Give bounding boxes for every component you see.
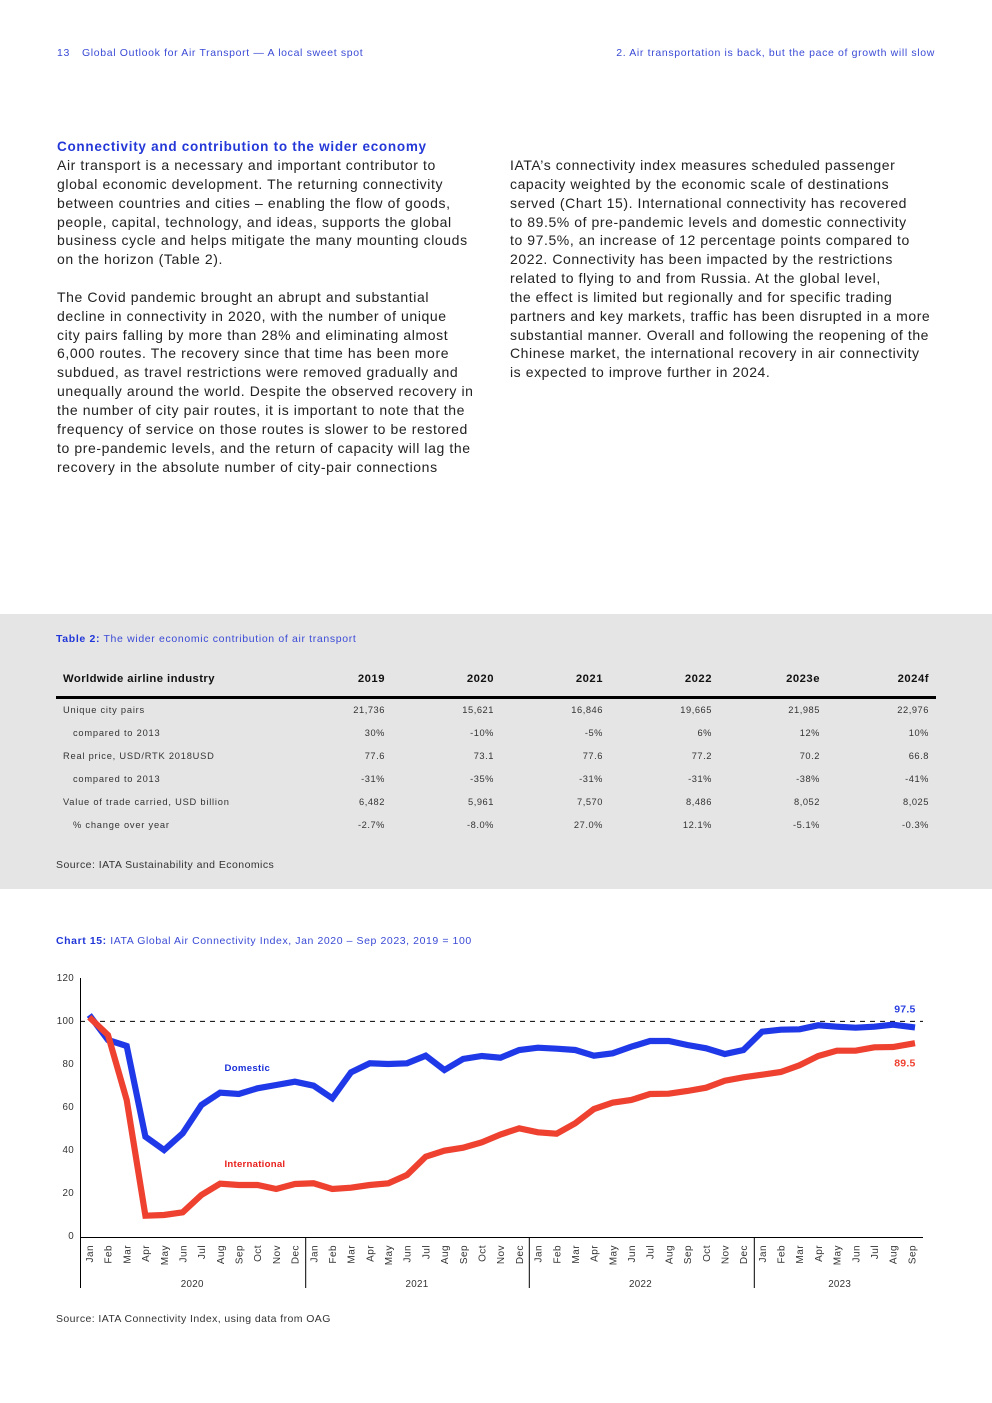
line: domestic (89, 1015, 915, 1150)
month labels: Nov (720, 1245, 732, 1264)
month labels: May (608, 1245, 619, 1265)
table: airline industry: -5.1% (793, 820, 820, 830)
text block: left column: recovery in the absolute number of city-pair connections (57, 458, 438, 474)
month labels: Apr (141, 1245, 152, 1262)
table: airline industry: 5,961 (468, 796, 494, 806)
month labels: Oct (702, 1245, 713, 1262)
year labels: 2020 (181, 1279, 204, 1290)
text block: left column: decline in connectivity in 2020, with the number of unique (57, 308, 447, 324)
text block: left column: people, capital, technology, and ideas, supports the global (57, 214, 452, 230)
table: airline industry: 2024f (898, 673, 929, 685)
month labels: Mar (347, 1245, 358, 1264)
text block: right column (510, 157, 930, 380)
text block: left column: subdued, as travel restrictions were removed gradually and (57, 364, 458, 380)
table: airline industry: compared to 2013 (73, 774, 160, 784)
month labels: May (160, 1245, 171, 1265)
table: airline industry: -0.3% (902, 820, 929, 830)
y axis labels (57, 973, 74, 1242)
table: airline industry: % change over year (73, 820, 170, 830)
table: airline industry: 30% (365, 728, 385, 738)
month labels: Jul (421, 1245, 432, 1259)
end value: domestic: 97.5 (894, 1004, 916, 1016)
month labels: Jun (178, 1245, 189, 1262)
month labels: Dec (515, 1245, 526, 1264)
text block: left column: to pre-pandemic levels, and the return of capacity will lag the (57, 440, 471, 456)
month labels: Aug (664, 1245, 675, 1264)
month labels: Oct (478, 1245, 488, 1262)
year labels: 2021 (406, 1279, 428, 1290)
month labels: Oct (253, 1245, 264, 1262)
month labels: Jun (851, 1245, 862, 1262)
text block: right column: Chinese market, the international recovery in air connectivity (510, 345, 920, 361)
month labels: Aug (440, 1245, 451, 1264)
month labels: Mar (122, 1245, 133, 1264)
table: airline industry: 8,025 (903, 796, 929, 806)
table: airline industry: -2.7% (358, 820, 385, 830)
series label: domestic: Domestic (224, 1063, 270, 1074)
text block: left column: business cycle and helps mitigate the many mounting clouds (57, 232, 468, 248)
text block: right column: IATA’s connectivity index measures scheduled passenger (510, 157, 895, 173)
month labels: Jan (534, 1245, 545, 1262)
y axis labels: 100 (57, 1016, 74, 1027)
table: airline industry: 2022 (685, 673, 712, 685)
text block: right column: substantial manner. Overall and following the reopening of the (510, 327, 929, 343)
y axis labels: 0 (68, 1231, 74, 1242)
table: airline industry: Real price, USD/RTK 2018USD (63, 750, 215, 760)
month labels: Mar (795, 1245, 806, 1264)
text block: left column: on the horizon (Table 2). (57, 251, 223, 267)
text block: left column: frequency of service on those routes is slower to be restored (57, 421, 468, 437)
month labels: Jan (309, 1245, 320, 1262)
month labels: Feb (552, 1245, 563, 1264)
table: airline industry: 2021 (576, 673, 603, 685)
table: airline industry: 2023e (786, 673, 820, 685)
table: airline industry: 77.6 (583, 750, 603, 760)
table: airline industry: -31% (579, 774, 603, 784)
table: airline industry: 6,482 (359, 796, 385, 806)
month labels: May (384, 1245, 395, 1265)
table: airline industry: 21,985 (788, 704, 820, 714)
table: airline industry: -8.0% (467, 820, 494, 830)
table: airline industry: 2020 (467, 673, 494, 685)
table: airline industry: 19,665 (680, 704, 712, 714)
month labels: Sep (907, 1245, 918, 1264)
text block: right column: to 89.5% of pre-pandemic levels and domestic connectivity (510, 214, 907, 230)
table: airline industry: 10% (909, 728, 929, 738)
text block: right column: served (Chart 15). International connectivity has recovered (510, 195, 907, 211)
table source: Source: IATA Sustainability and Economics (56, 859, 274, 871)
month labels: Dec (739, 1245, 750, 1264)
month labels: Jan (85, 1245, 96, 1262)
text block: left column: Air transport is a necessary and important contributor to (57, 157, 436, 173)
text block: right column: partners and key markets, traffic has been disrupted in a more (510, 308, 930, 324)
text block: left column: city pairs falling by more than 28% and eliminating almost (57, 327, 448, 343)
month labels: Jun (403, 1245, 414, 1262)
text block: left column: the number of city pair routes, it is important to note that the (57, 402, 465, 418)
series label: international: International (224, 1159, 285, 1170)
month labels: Nov (272, 1245, 283, 1264)
axes (80, 978, 923, 1288)
page header left: 13 Global Outlook for Air Transport — A local sweet spot (57, 47, 363, 59)
table: airline industry: -5% (585, 728, 603, 738)
text block: left column (57, 157, 474, 475)
reference line at 100 (80, 1020, 923, 1022)
month labels: Jul (870, 1245, 881, 1259)
year labels: 2023 (828, 1279, 851, 1290)
table: airline industry: 12% (800, 728, 820, 738)
text block: right column: to 97.5%, an increase of 12 percentage points compared to (510, 232, 910, 248)
month labels: Apr (814, 1245, 825, 1262)
y axis labels: 40 (62, 1145, 74, 1156)
table: airline industry: -38% (796, 774, 820, 784)
month labels: May (833, 1245, 844, 1265)
table: airline industry: Value of trade carried, USD billion (63, 796, 230, 806)
year labels (181, 1279, 851, 1290)
text block: right column: 2022. Connectivity has been impacted by the restrictions (510, 251, 893, 267)
table: airline industry: 77.2 (692, 750, 712, 760)
table: airline industry: -41% (905, 774, 929, 784)
table: airline industry: 2019 (358, 673, 385, 685)
table: airline industry: Worldwide airline industry (63, 673, 215, 685)
table: airline industry: 12.1% (683, 820, 712, 830)
table: airline industry: 6% (697, 728, 712, 738)
table: airline industry: -10% (470, 728, 494, 738)
table: airline industry: 8,486 (686, 796, 712, 806)
year labels: 2022 (629, 1279, 652, 1290)
text block: right column: capacity weighted by the economic scale of destinations (510, 176, 889, 192)
month labels: Jul (197, 1245, 208, 1259)
month labels: Nov (496, 1245, 507, 1264)
table: airline industry: 27.0% (574, 820, 603, 830)
table: airline industry: 8,052 (794, 796, 820, 806)
month labels: Jul (646, 1245, 657, 1259)
month labels: Sep (234, 1245, 246, 1264)
section heading: Connectivity and contribution to the wider economy (57, 139, 427, 154)
table caption: Table 2: The wider economic contribution of air transport (56, 633, 356, 645)
table: airline industry: 22,976 (897, 704, 929, 714)
month labels: Aug (216, 1245, 227, 1264)
table: airline industry: 21,736 (353, 704, 385, 714)
y axis labels: 80 (62, 1059, 74, 1070)
month labels: Feb (328, 1245, 339, 1264)
month labels: Sep (459, 1245, 470, 1264)
y axis labels: 120 (57, 973, 74, 984)
table: airline industry: 16,846 (571, 704, 603, 714)
text block: right column: related to flying to and from Russia. At the global level, (510, 270, 881, 286)
table: airline industry: 15,621 (462, 704, 494, 714)
end value: international: 89.5 (894, 1058, 916, 1070)
text block: left column: global economic development. The returning connectivity (57, 176, 443, 192)
month labels: Feb (776, 1245, 788, 1264)
table: airline industry: 66.8 (909, 750, 929, 760)
table: airline industry: Unique city pairs (63, 704, 145, 714)
text block: right column: the effect is limited but regionally and for specific trading (510, 289, 892, 305)
table: airline industry: -31% (688, 774, 712, 784)
month labels: Apr (590, 1245, 601, 1262)
chart source: Source: IATA Connectivity Index, using data from OAG (56, 1313, 331, 1325)
table: airline industry: 73.1 (474, 750, 494, 760)
text block: left column: The Covid pandemic brought an abrupt and substantial (57, 289, 429, 305)
month labels: Jun (627, 1245, 638, 1262)
month labels: Feb (104, 1245, 115, 1264)
month labels: Mar (571, 1245, 582, 1264)
text block: left column: between countries and cities – enabling the flow of goods, (57, 195, 451, 211)
table: airline industry: -35% (470, 774, 494, 784)
month labels: Dec (291, 1245, 302, 1264)
table: airline industry (56, 673, 936, 830)
month labels (85, 1245, 918, 1265)
line: international (89, 1017, 915, 1216)
text block: left column: unequally around the world. Despite the observed recovery in (57, 383, 474, 399)
table: airline industry: 70.2 (800, 750, 820, 760)
text block: left column: 6,000 routes. The recovery since that time has been more (57, 345, 449, 361)
month labels: Apr (365, 1245, 376, 1262)
table: airline industry: 77.6 (365, 750, 385, 760)
page header right: 2. Air transportation is back, but the pace of growth will slow (616, 47, 935, 59)
table: airline industry: -31% (361, 774, 385, 784)
month labels: Sep (683, 1245, 694, 1264)
month labels: Aug (889, 1245, 900, 1264)
text block: right column: is expected to improve further in 2024. (510, 364, 770, 380)
y axis labels: 60 (62, 1102, 74, 1113)
y axis labels: 20 (62, 1188, 74, 1199)
chart caption: Chart 15: IATA Global Air Connectivity Index, Jan 2020 – Sep 2023, 2019 = 100 (56, 935, 472, 947)
table: airline industry: 7,570 (577, 796, 603, 806)
month labels: Jan (758, 1245, 769, 1262)
table: airline industry: compared to 2013 (73, 728, 160, 738)
panel: table 2 (0, 614, 992, 889)
